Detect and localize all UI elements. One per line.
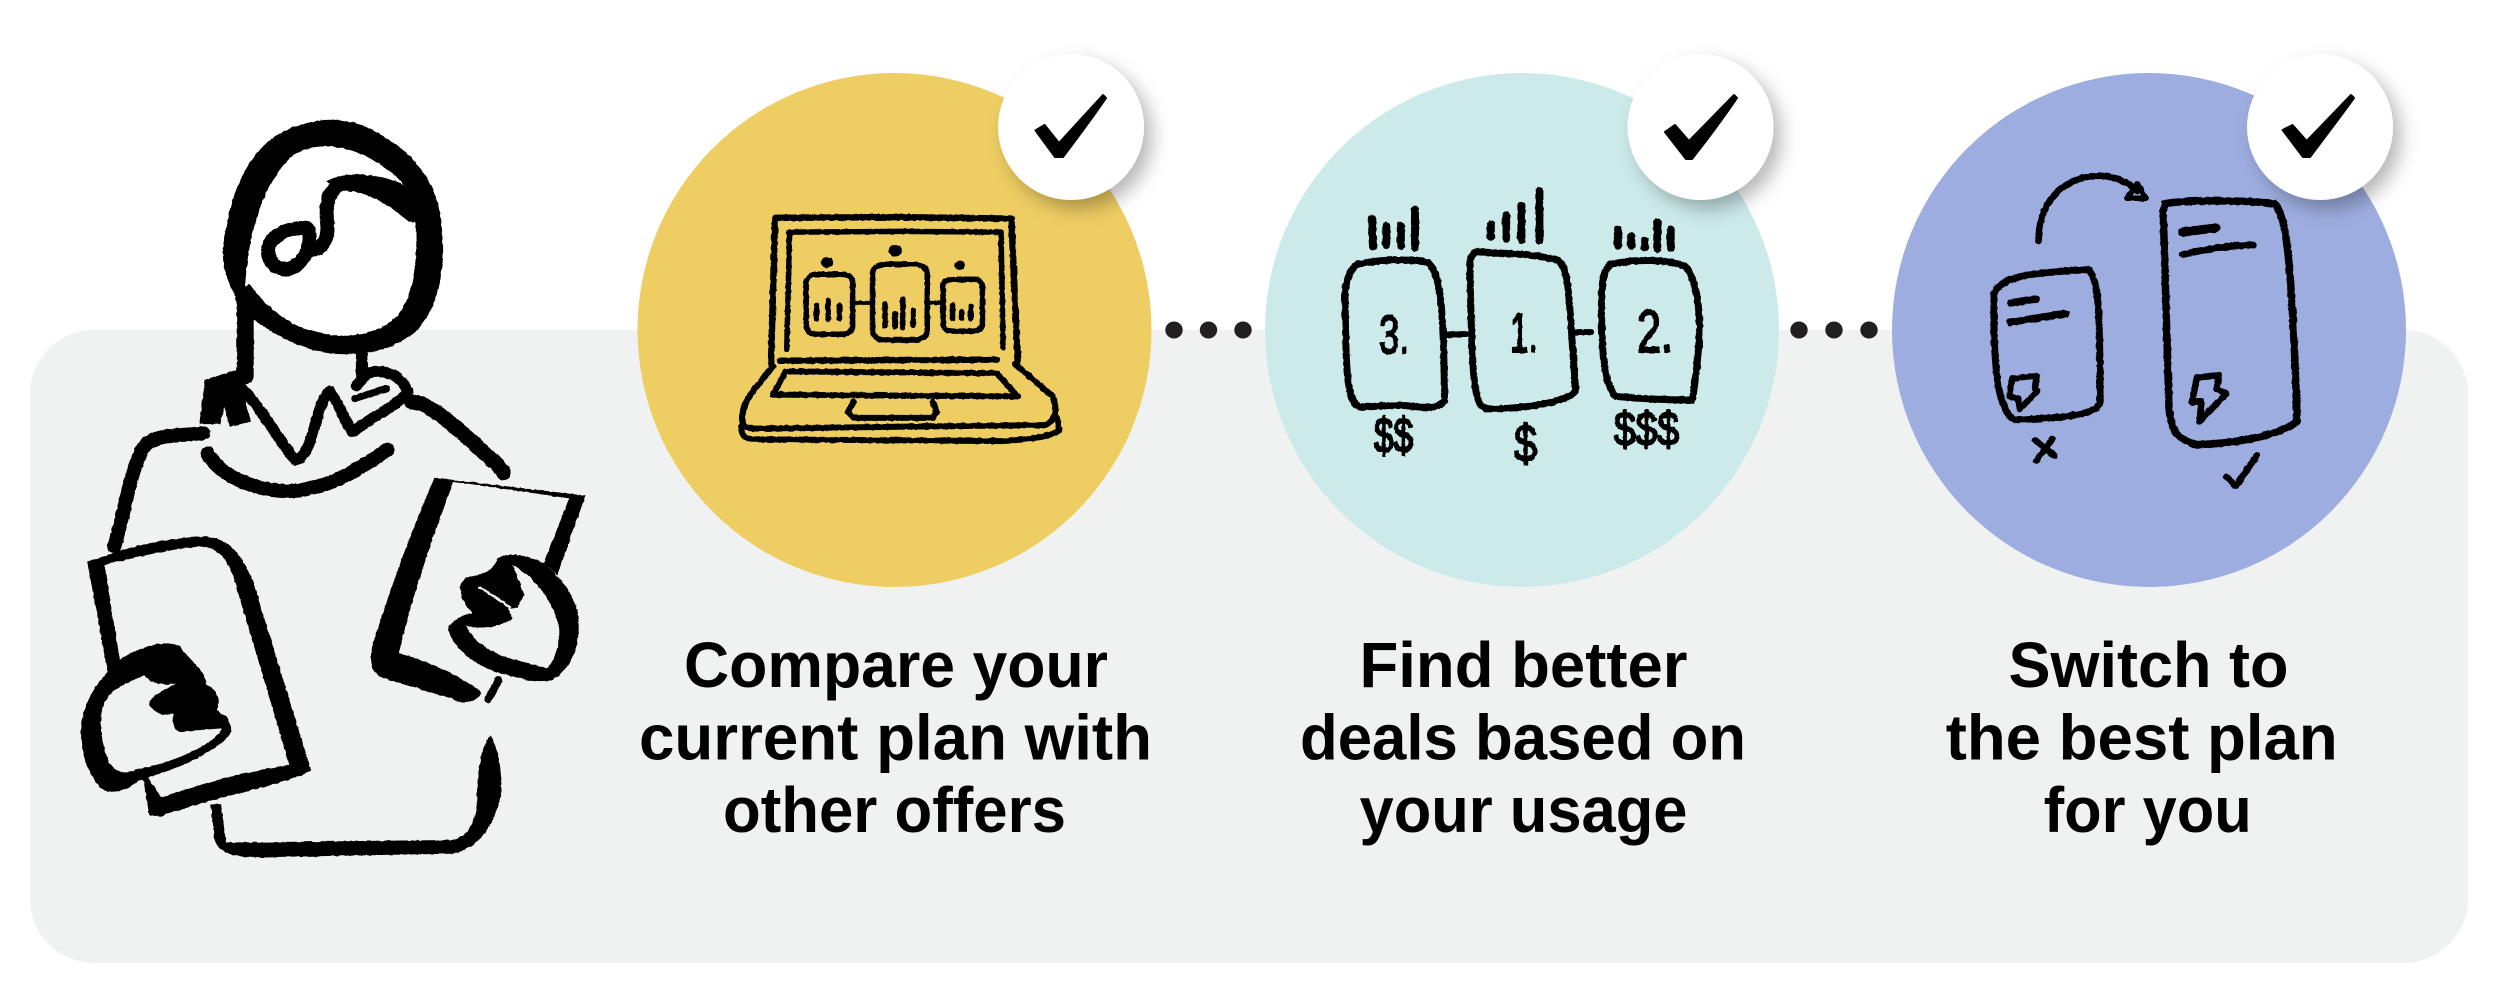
connector dots 1 xyxy=(1165,322,1252,338)
old plan bolt xyxy=(2009,376,2038,409)
background panel xyxy=(30,330,2468,963)
new plan bolt xyxy=(2192,375,2226,421)
shoulders xyxy=(114,402,504,547)
right hand xyxy=(448,554,579,682)
text: step 3 label xyxy=(1946,629,2338,846)
left hand xyxy=(81,643,231,792)
text: step 2 label: deals based on xyxy=(1300,702,1746,774)
new plan line two xyxy=(2182,245,2253,255)
left tablet xyxy=(87,537,311,817)
price signs xyxy=(1374,402,1679,473)
plan card 1 xyxy=(1470,252,1576,409)
icon: check xyxy=(2283,95,2354,157)
text: step 1 label: current plan with xyxy=(639,702,1152,774)
check badge 1 xyxy=(998,54,1144,200)
rating stars xyxy=(821,245,965,270)
new plan line one xyxy=(2182,228,2216,232)
old plan card xyxy=(1994,270,2100,420)
right tablet xyxy=(371,478,585,702)
panel: step 1 circle xyxy=(638,73,1152,587)
icon: check xyxy=(1665,95,1737,159)
plan cards on screen xyxy=(806,264,982,340)
text: step 1 label xyxy=(639,629,1152,846)
price signs: $ xyxy=(1514,415,1537,473)
text: step 3 label: Switch to xyxy=(2008,629,2288,701)
rank numbers xyxy=(1379,298,1673,365)
cross mark xyxy=(2035,439,2054,461)
torso outline xyxy=(211,735,501,858)
text: step 2 label xyxy=(1300,629,1746,846)
icon: person holding two tablets xyxy=(81,120,585,858)
icon: three ranked plans xyxy=(1345,191,1699,409)
neck xyxy=(245,309,362,376)
new plan card xyxy=(2163,201,2297,445)
laptop body xyxy=(742,217,1059,441)
collar shadow curve xyxy=(208,450,388,491)
icon: switching phone plans xyxy=(1994,176,2297,486)
connector dots 2 xyxy=(1790,322,1878,338)
panel: step 3 circle xyxy=(1892,73,2406,587)
text: step 1 label: Compare your xyxy=(684,629,1108,701)
arrow xyxy=(2039,176,2146,241)
text: step 2 label: Find better xyxy=(1360,629,1688,701)
old plan lines xyxy=(2010,299,2066,322)
text: step 3 label: for you xyxy=(2044,774,2252,846)
collar xyxy=(199,370,408,460)
plan card 3 xyxy=(1345,260,1444,407)
tick mark xyxy=(2226,455,2257,486)
rank numbers: 1. xyxy=(1510,301,1538,364)
price signs: $$ xyxy=(1374,409,1413,463)
rank numbers: 3. xyxy=(1379,305,1409,365)
rank numbers: 2. xyxy=(1637,298,1673,365)
text: step 3 label: the best plan xyxy=(1946,702,2338,774)
check badge 2 xyxy=(1628,54,1774,200)
icon: check xyxy=(1036,95,1106,157)
connectors xyxy=(1448,332,1591,335)
text: step 1 label: other offers xyxy=(723,774,1066,846)
text: step 2 label: your usage xyxy=(1360,774,1688,846)
head xyxy=(223,120,443,354)
icon: laptop comparing plans xyxy=(742,217,1059,441)
panel: step 2 circle xyxy=(1265,73,1779,587)
price signs: $$$ xyxy=(1614,402,1679,455)
check badge 3 xyxy=(2247,54,2393,200)
plan card 2 xyxy=(1601,260,1699,400)
signal bars xyxy=(1372,191,1671,249)
